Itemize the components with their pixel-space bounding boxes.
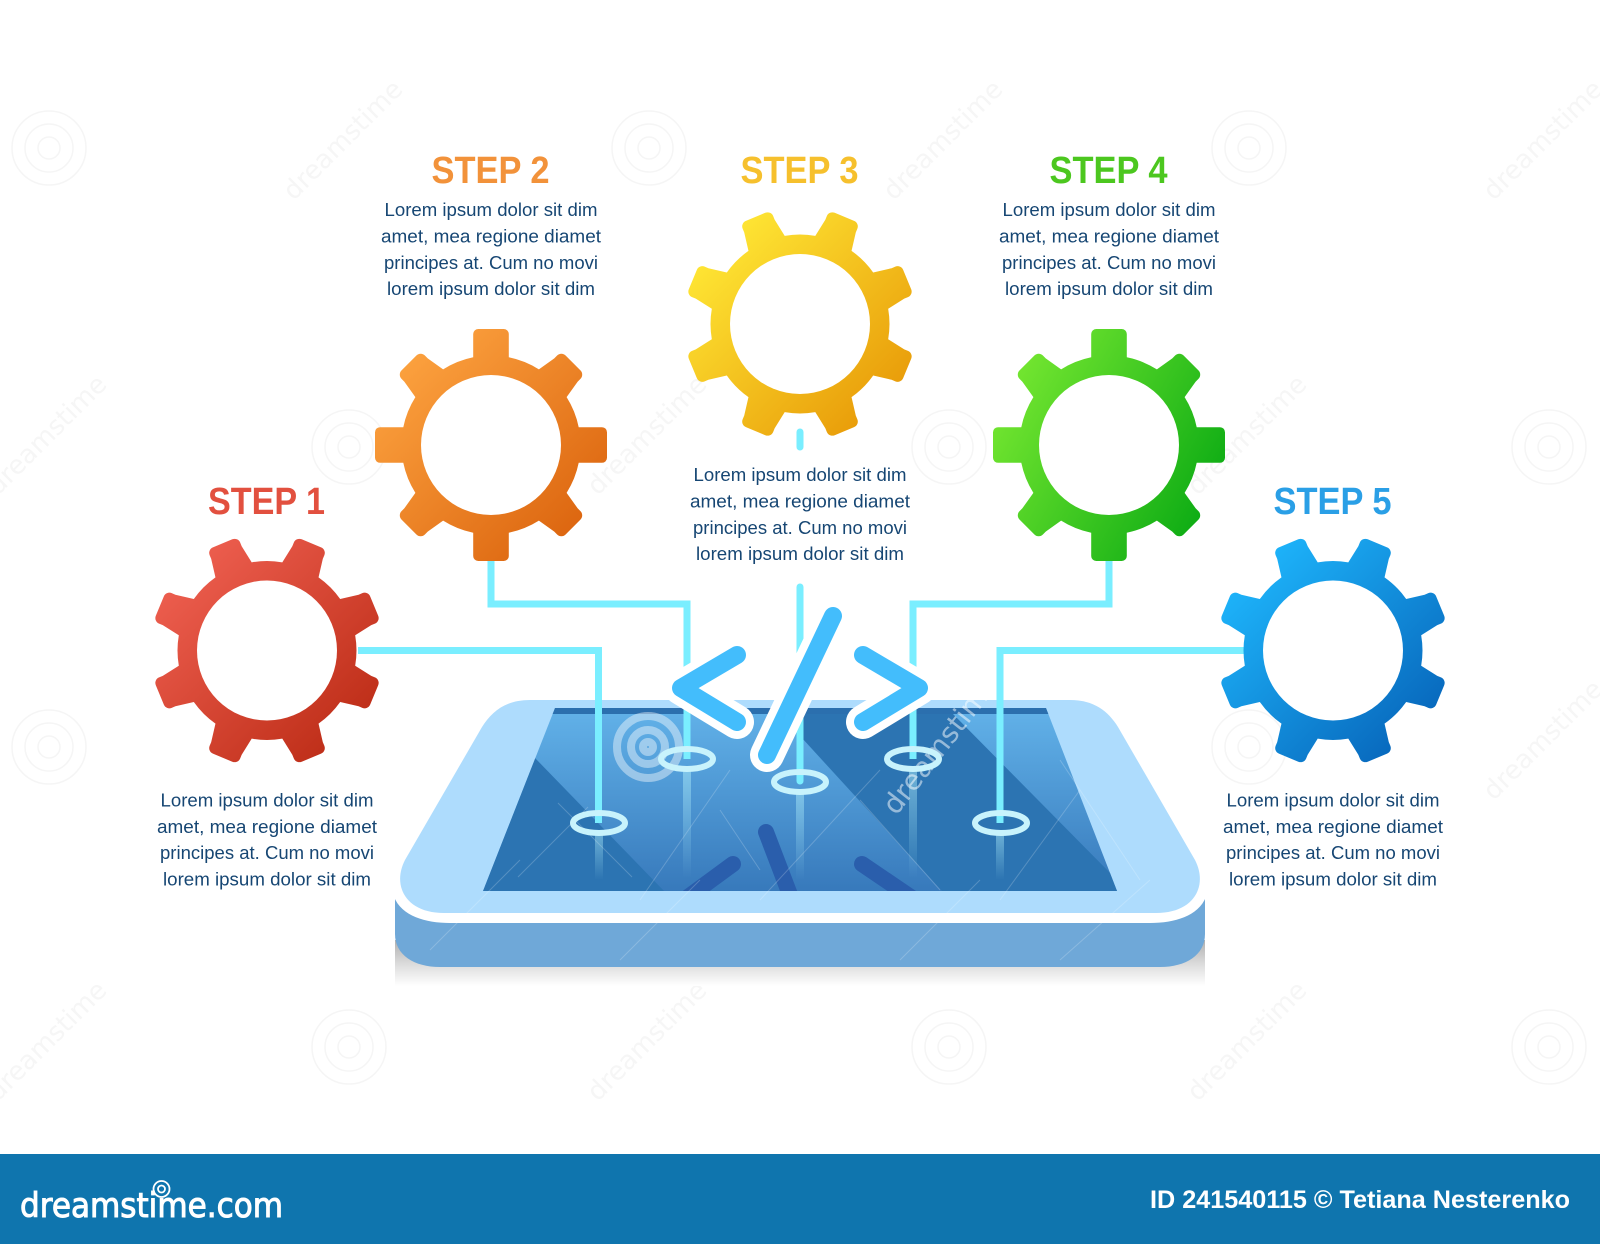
- text block: step 1: principes at. Cum no movi: [160, 843, 374, 863]
- text block: step 2: principes at. Cum no movi: [384, 253, 598, 273]
- text block: step 2: Lorem ipsum dolor sit dim: [384, 200, 598, 220]
- connector wire: step 2: [491, 556, 687, 759]
- heading: step 2: STEP 2: [432, 150, 550, 192]
- text block: step 3: principes at. Cum no movi: [693, 518, 907, 538]
- icon: yellow gear: [684, 208, 916, 440]
- text block: step 2: [381, 200, 601, 299]
- watermark pattern: dreamstime: [1182, 370, 1313, 501]
- text block: step 3: [690, 465, 910, 564]
- text block: step 5: principes at. Cum no movi: [1226, 843, 1440, 863]
- footer bar: [0, 1154, 1600, 1244]
- panel: step 1: [151, 481, 383, 890]
- watermark over phone: dreamstime: [876, 668, 1005, 821]
- phone ground shadow: [395, 940, 1205, 986]
- icon: blue gear: [1217, 534, 1449, 766]
- heading: step 1: STEP 1: [208, 481, 325, 523]
- text block: step 2: amet, mea regione diamet: [381, 226, 601, 246]
- icon: orange gear: [375, 329, 607, 561]
- heading: step 3: STEP 3: [740, 150, 858, 192]
- phone illustration: [395, 700, 1205, 986]
- panel: step 2: [375, 150, 607, 561]
- icon: logo spiral: [154, 1181, 170, 1197]
- text block: step 5: [1223, 790, 1443, 890]
- connector wire: step 1: [358, 650, 598, 823]
- text block: step 4: Lorem ipsum dolor sit dim: [1002, 200, 1216, 220]
- watermark pattern: dreamstime: [582, 976, 713, 1107]
- connector wire: step 4: [913, 556, 1109, 759]
- phone screen: [480, 708, 1120, 900]
- panel: step 3: [684, 150, 916, 564]
- heading: step 5: STEP 5: [1274, 481, 1392, 523]
- connector wire: step 5: [1000, 650, 1245, 823]
- watermark pattern: dreamstime: [878, 75, 1009, 206]
- watermark pattern: dreamstime: [1182, 976, 1313, 1107]
- text block: step 1: amet, mea regione diamet: [157, 817, 377, 837]
- text block: step 2: lorem ipsum dolor sit dim: [387, 279, 595, 299]
- text block: step 5: amet, mea regione diamet: [1223, 817, 1443, 837]
- phone light face: [400, 700, 1200, 913]
- text block: step 1: lorem ipsum dolor sit dim: [163, 870, 371, 890]
- wire end rings: [573, 749, 1027, 833]
- phone white edge: [394, 880, 1206, 923]
- text block: step 3: lorem ipsum dolor sit dim: [696, 544, 904, 564]
- icon: red gear: [151, 534, 383, 766]
- text block: step 5: Lorem ipsum dolor sit dim: [1226, 790, 1440, 810]
- text block: step 3: Lorem ipsum dolor sit dim: [694, 465, 906, 485]
- panel: step 5: [1217, 481, 1449, 890]
- watermark over phone: [430, 668, 1150, 960]
- heading: step 4: STEP 4: [1050, 150, 1168, 192]
- connector wire: step 3 top: [796, 432, 804, 447]
- text block: step 4: lorem ipsum dolor sit dim: [1005, 279, 1213, 299]
- text block: step 1: [157, 790, 377, 890]
- phone side band: [395, 895, 1205, 967]
- icon: green gear: [993, 329, 1225, 561]
- connector wire: step 3 bottom: [796, 587, 804, 781]
- text block: step 3: amet, mea regione diamet: [690, 492, 910, 512]
- text block: step 4: [999, 200, 1219, 299]
- watermark pattern: dreamstime: [278, 75, 409, 206]
- panel: step 4: [993, 150, 1225, 561]
- footer logo text: dreamstime.com: [20, 1186, 283, 1226]
- watermark pattern: dreamstime: [582, 370, 713, 501]
- icon: code brackets: [681, 616, 919, 755]
- footer credit: ID 241540115 © Tetiana Nesterenko: [1150, 1186, 1570, 1214]
- text block: step 5: lorem ipsum dolor sit dim: [1229, 870, 1437, 890]
- text block: step 4: amet, mea regione diamet: [999, 226, 1219, 246]
- text block: step 4: principes at. Cum no movi: [1002, 253, 1216, 273]
- text block: step 1: Lorem ipsum dolor sit dim: [160, 790, 374, 810]
